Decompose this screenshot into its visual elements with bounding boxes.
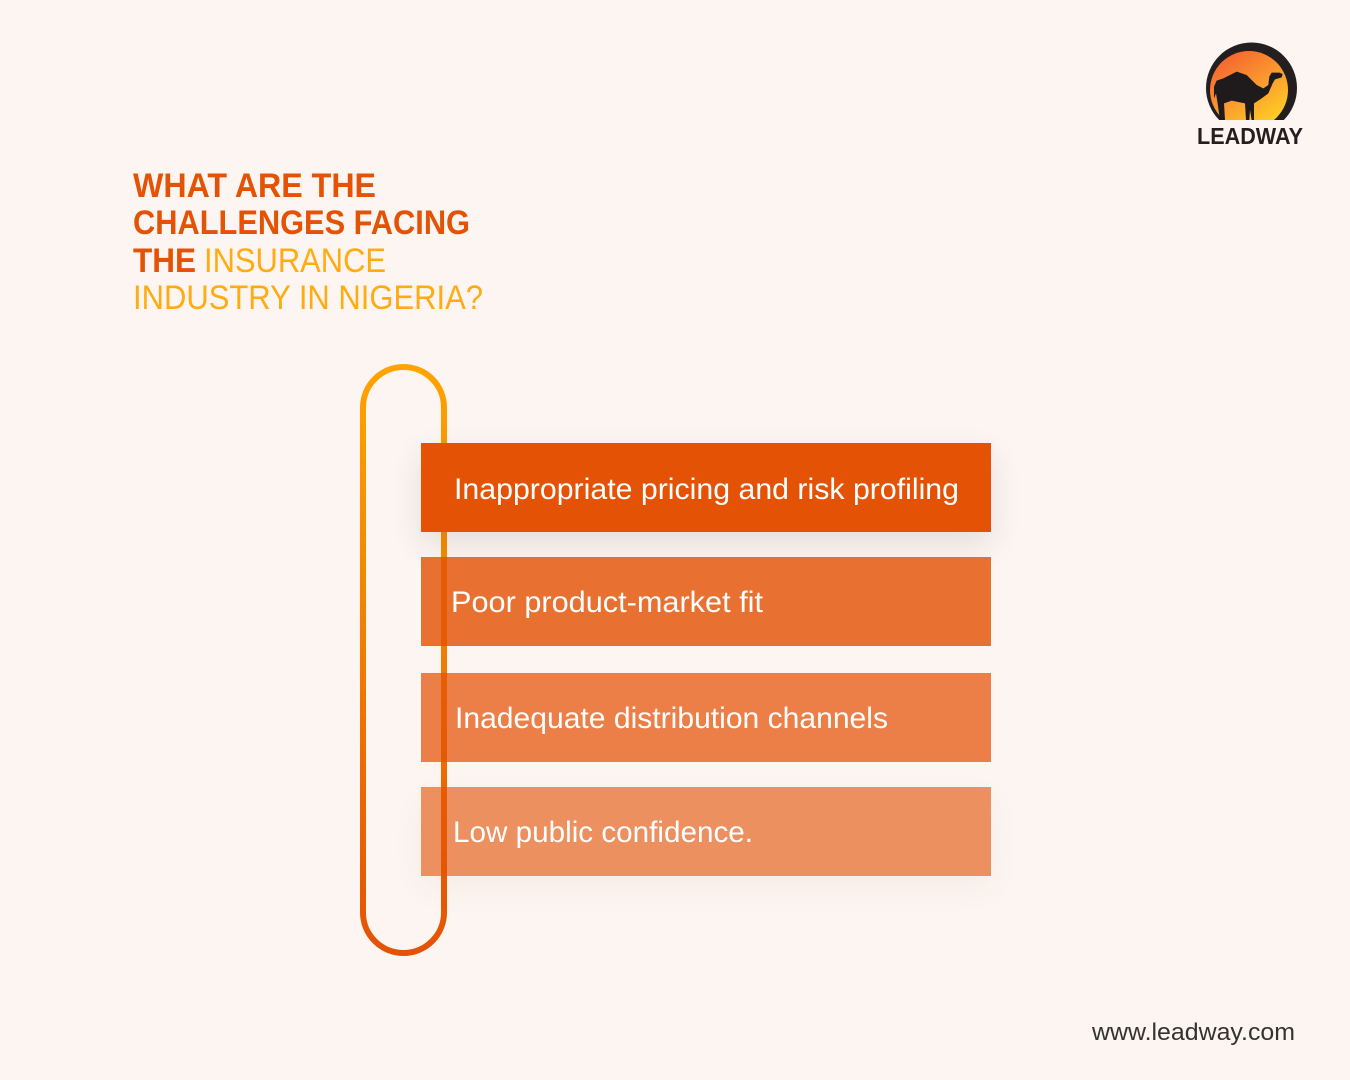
title: INDUSTRY IN NIGERIA? [133,279,483,317]
bar 1: pricing and risk profiling [421,443,991,532]
logo: Leadway camel [1197,42,1303,149]
logo: Leadway camel: LEADWAY [1197,123,1303,149]
bar 2: product-market fit [421,557,991,646]
bar 4: public confidence: Low public confidence. [453,816,753,849]
title [133,167,483,317]
title: THE [133,242,196,280]
bar 3: distribution channels [421,673,991,762]
title: INSURANCE [204,242,386,280]
website url: www.leadway.com [1091,1019,1295,1046]
title: WHAT ARE THE [133,167,376,205]
bar 4: public confidence [421,787,991,876]
bar 1: pricing and risk profiling: Inappropriate pricing and risk profiling [454,473,959,506]
title: CHALLENGES FACING [133,204,470,242]
bar 3: distribution channels: Inadequate distribution channels [455,702,888,735]
bar 2: product-market fit: Poor product-market fit [451,586,764,619]
